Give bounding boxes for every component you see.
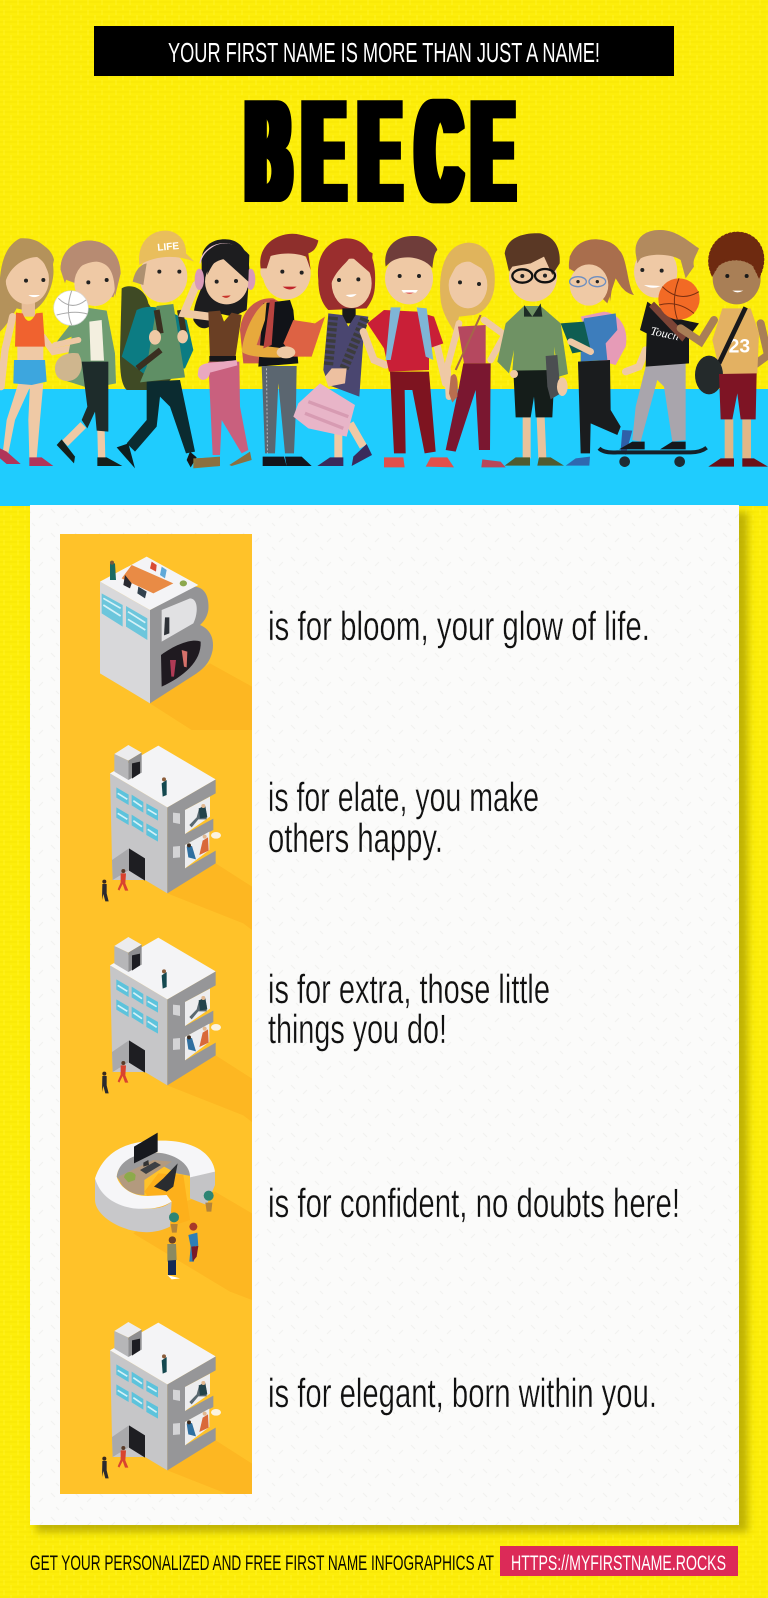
text: letter E: is for elate, you make <box>268 774 539 820</box>
title: name: E <box>360 71 399 233</box>
text: letter E second <box>268 966 550 1052</box>
student 11: skateboarder <box>599 230 707 467</box>
student 5: red hair with book <box>240 234 325 466</box>
student 3: hiker with cap and backpack <box>117 231 220 468</box>
student 11: skateboarder: Touch <box>649 324 680 343</box>
title: name: E <box>304 71 343 233</box>
icon: letter C reception <box>95 1133 252 1300</box>
text: letter E second: is for extra, those little <box>268 966 550 1012</box>
student 8: blonde with shoulder bag <box>440 243 506 467</box>
student 9: glasses and green sweater <box>497 233 568 466</box>
text: letter E <box>268 774 539 861</box>
student 12: basketball player <box>658 233 768 467</box>
student 4: pink headphones <box>184 239 255 467</box>
footer call to action: GET YOUR PERSONALIZED AND FREE FIRST NAME INFOGRAPHICS AT <box>30 1552 494 1575</box>
student 7: red shirt with blue backpack <box>363 236 454 467</box>
student 1: orange top <box>0 238 71 466</box>
student 6: red bob with pink bag <box>293 238 375 466</box>
text: letter E second: things you do! <box>268 1006 447 1052</box>
icon: letter E building 3 <box>102 1322 252 1507</box>
orange illustration column <box>60 534 252 1494</box>
group of students illustration <box>0 230 768 468</box>
title: name: E <box>474 71 512 233</box>
footer link button <box>500 1546 738 1576</box>
title: name: C <box>418 71 460 233</box>
icon: letter E building <box>102 745 252 930</box>
illustrations clipped to column <box>95 557 252 1507</box>
icon: letter B building <box>100 557 252 730</box>
title: name <box>248 71 512 233</box>
student 12: basketball player: 23 <box>729 337 750 358</box>
title: name: B <box>248 71 289 233</box>
blue floor band <box>0 389 768 506</box>
white content panel <box>30 505 739 1525</box>
icon: letter E building 2 <box>102 937 252 1122</box>
student 2: green jacket with volleyball <box>54 241 122 466</box>
panel shadow <box>36 512 748 1532</box>
header bar <box>94 26 674 76</box>
student 3: hiker with cap and backpack: LIFE <box>157 241 180 254</box>
text: letter E: others happy. <box>268 815 443 861</box>
student 10: ponytail with tablet <box>561 239 634 466</box>
